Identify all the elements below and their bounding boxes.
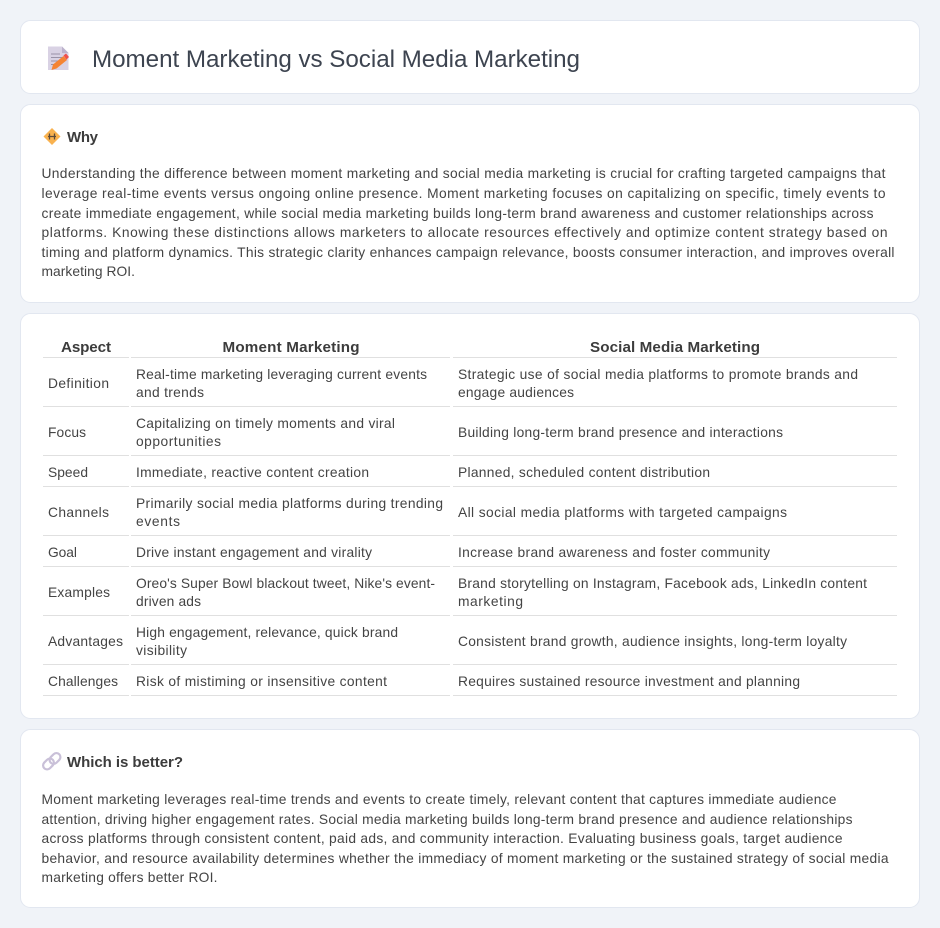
row: advantages: visibility <box>136 643 187 658</box>
text block: which is better: behavior, and resource availability determines whether the immediacy of moment marketing or the sustained strategy of social media <box>42 851 889 866</box>
panel: why <box>20 104 920 302</box>
text block: which is better <box>42 792 889 885</box>
text block: why: Understanding the difference between moment marketing and social media marketing is crucial for crafting targeted campaigns that <box>42 166 886 181</box>
row: definition: Strategic use of social media platforms to promote brands and <box>458 367 858 382</box>
row: channels: Primarily social media platforms during trending <box>136 496 443 511</box>
row: speed <box>48 465 710 480</box>
row: definition <box>48 367 858 400</box>
row: challenges: Requires sustained resource investment and planning <box>458 674 800 689</box>
row: definition: Definition <box>48 376 109 391</box>
text block: why: marketing ROI. <box>42 264 135 279</box>
row: examples: Oreo's Super Bowl blackout tweet, Nike's event- <box>136 576 435 591</box>
panel: header <box>20 20 920 94</box>
text block: which is better: across platforms through consistent content, paid ads, and community interaction. Evaluating business goals, target audience <box>42 831 843 846</box>
row: channels: events <box>136 514 180 529</box>
text block: which is better: Moment marketing leverages real-time trends and events to create timely, relevant content that captures immediate audience <box>42 792 837 807</box>
title: Moment Marketing vs Social Media Marketing <box>92 46 580 73</box>
row: channels: All social media platforms with targeted campaigns <box>458 505 787 520</box>
text block: why: create immediate engagement, while social media marketing builds long-term brand awareness and customer relationships across <box>42 206 874 221</box>
row: definition: Real-time marketing leveraging current events <box>136 367 427 382</box>
row: advantages <box>48 625 847 658</box>
row: focus: Building long-term brand presence and interactions <box>458 425 783 440</box>
text block: which is better: marketing offers better ROI. <box>42 870 218 885</box>
row: examples: Examples <box>48 585 110 600</box>
row: challenges: Challenges <box>48 674 118 689</box>
heading: why: Why <box>67 129 99 146</box>
row: focus: Capitalizing on timely moments and viral <box>136 416 395 431</box>
row: advantages: High engagement, relevance, quick brand <box>136 625 398 640</box>
row: examples: driven ads <box>136 594 201 609</box>
panel: which is better <box>20 730 920 908</box>
row: examples: Brand storytelling on Instagram, Facebook ads, LinkedIn content <box>458 576 867 591</box>
row: channels <box>48 496 787 529</box>
row: challenges <box>48 674 800 689</box>
table header <box>61 339 760 356</box>
row: advantages: Advantages <box>48 634 123 649</box>
row: challenges: Risk of mistiming or insensitive content <box>136 674 387 689</box>
row: speed: Planned, scheduled content distribution <box>458 465 710 480</box>
icon: chain link <box>41 751 62 771</box>
row: definition: and trends <box>136 385 204 400</box>
table header: Social Media Marketing <box>590 339 760 356</box>
text block: why: platforms. Knowing these distinctions allows marketers to allocate resources effectively and optimize content strategy based on <box>42 225 888 240</box>
row: examples: marketing <box>458 594 523 609</box>
text block: why <box>42 166 894 279</box>
row: focus <box>48 416 783 449</box>
text block: why: timing and platform dynamics. This strategic clarity enhances campaign relevance, boosts consumer interaction, and improves overall <box>42 245 894 260</box>
icon: diamond sign <box>44 128 60 145</box>
row: examples <box>48 576 867 609</box>
row: channels: Channels <box>48 505 109 520</box>
text block: which is better: attention, driving higher engagement rates. Social media marketing builds long-term brand presence and audience relationships <box>42 812 853 827</box>
row: goal <box>48 545 770 560</box>
heading: which is better: Which is better? <box>67 754 183 771</box>
row: speed: Immediate, reactive content creation <box>136 465 369 480</box>
icon: memo and pencil <box>48 46 69 70</box>
row: definition: engage audiences <box>458 385 574 400</box>
row: goal: Increase brand awareness and foster community <box>458 545 770 560</box>
table rules <box>43 358 897 696</box>
table header: Aspect <box>61 339 111 356</box>
row: advantages: Consistent brand growth, audience insights, long-term loyalty <box>458 634 847 649</box>
panel: comparison table <box>20 314 920 718</box>
row: goal: Drive instant engagement and virality <box>136 545 372 560</box>
row: focus: opportunities <box>136 434 221 449</box>
row: focus: Focus <box>48 425 86 440</box>
row: speed: Speed <box>48 465 88 480</box>
table header: Moment Marketing <box>222 339 360 356</box>
text block: why: leverage real-time events versus ongoing online presence. Moment marketing focuses on capitalizing on specific, timely events to <box>42 186 886 201</box>
row: goal: Goal <box>48 545 77 560</box>
